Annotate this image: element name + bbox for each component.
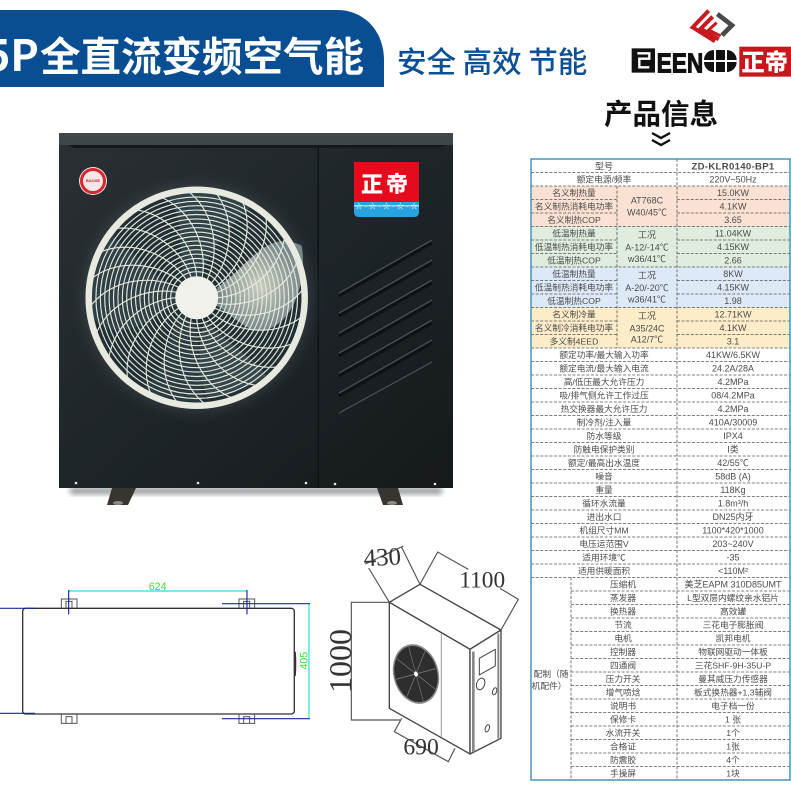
table rows: parameters: -35 xyxy=(726,553,740,563)
table rows: low temp heating: 11.04KW xyxy=(715,229,752,239)
table rows: parameters: 热交换器最大允许压力 xyxy=(561,403,647,414)
icon: double chevron xyxy=(652,133,670,145)
table rows: cooling: 12.71KW xyxy=(714,310,752,320)
table rows: accessories: 保修卡 xyxy=(610,714,636,725)
table rows: parameters: 制冷剂/注入量 xyxy=(577,417,632,428)
table rows: parameters: 重量 xyxy=(595,484,613,495)
table rows: accessories: 1张 xyxy=(726,742,740,752)
table rows: ultra low temp heating: 8KW xyxy=(723,269,743,279)
sticker: BAOSE xyxy=(86,178,100,183)
table rows: accessories: 说明书 xyxy=(610,700,636,711)
table rows: accessories label: 机配件） xyxy=(532,680,566,691)
table rows: ultra low temp heating: 低温制热消耗电功率 xyxy=(535,282,613,293)
table rows: parameters: 4.2MPa xyxy=(717,404,749,414)
dimension lines xyxy=(351,546,518,762)
table rows: nominal heating: W40/45℃ xyxy=(627,208,667,218)
table rows: accessories: 换热器 xyxy=(610,606,636,617)
table rows: cooling: 名义制冷量 xyxy=(552,309,596,320)
table rows: parameters: 额定功率/最大输入功率 xyxy=(559,349,649,360)
table rows: ultra low temp heating: 低温制热COP xyxy=(547,295,601,306)
unit feet xyxy=(107,488,403,505)
logo wordmark xyxy=(632,47,737,78)
table rows: ultra low temp heating: 4.15KW xyxy=(717,283,750,293)
table rows: nominal heating: 名义制热量 xyxy=(552,187,596,198)
table rows: accessories: 高效罐 xyxy=(720,606,746,617)
table rows: cooling: 名义制冷消耗电功率 xyxy=(535,322,613,333)
fan xyxy=(69,170,325,426)
table rows: ultra low temp heating: 工况 xyxy=(638,270,656,280)
table grid xyxy=(531,159,790,780)
table rows: parameters: 额定电流/最大输入电流 xyxy=(559,363,649,374)
table rows: ultra low temp heating: 1.98 xyxy=(724,296,742,306)
table rows: ultra low temp heating: w36/41℃ xyxy=(627,294,666,304)
table rows: parameters: 机组尺寸MM xyxy=(579,525,629,536)
unit shadow xyxy=(70,488,442,494)
table rows: cooling xyxy=(535,309,752,347)
table rows: parameters: DN25内牙 xyxy=(712,511,754,522)
dimension 624: 624 xyxy=(149,581,167,593)
table rows: low temp heating: 低温制热COP xyxy=(547,255,601,266)
table rows: parameters: 适用供暖面积 xyxy=(578,565,630,576)
table rows: ultra low temp heating xyxy=(535,268,750,306)
table rows: low temp heating: 工况 xyxy=(638,230,656,240)
table rows: accessories: 压力开关 xyxy=(606,673,641,684)
table rows: parameters: 410A/30009 xyxy=(709,418,757,428)
table rows: nominal heating: 名义制热消耗电功率 xyxy=(535,201,613,212)
sticker xyxy=(79,167,107,195)
plan view dimension drawing xyxy=(0,581,310,723)
table rows: parameters: IPX4 xyxy=(723,431,743,441)
icon: logo chevrons xyxy=(693,11,732,41)
table rows: basic: 额定电源/频率 xyxy=(577,174,632,185)
table rows: accessories: 凯邦电机 xyxy=(716,633,751,644)
table rows: parameters: 4.2MPa xyxy=(717,377,749,387)
table colour bands xyxy=(531,186,790,348)
table rows: accessories: 物联网驱动一体板 xyxy=(698,646,768,657)
table rows: basic xyxy=(577,162,775,185)
table rows: accessories: 4个 xyxy=(726,755,740,765)
table rows: parameters: 额定/最高出水温度 xyxy=(568,457,640,468)
table rows: basic: 220V~50Hz xyxy=(709,175,757,185)
table rows: parameters: 噪音 xyxy=(595,471,613,482)
table rows: accessories xyxy=(606,579,782,779)
unit outline xyxy=(389,584,501,754)
table rows: nominal heating: 15.0KW xyxy=(717,188,750,198)
table rows: parameters: 高/低压最大允许压力 xyxy=(564,376,644,387)
fan hub xyxy=(175,276,218,319)
table rows: parameters: 防触电保护类别 xyxy=(574,444,634,455)
table rows: accessories label: 配制（随 xyxy=(534,668,569,679)
table rows: parameters: 电压运范围V xyxy=(579,538,629,549)
table rows: parameters: 防水等级 xyxy=(587,430,622,441)
brand badge xyxy=(354,162,419,217)
side louvers xyxy=(339,240,432,413)
fan blades xyxy=(92,193,303,402)
table rows: cooling: A12/7℃ xyxy=(631,334,663,344)
table rows: parameters: 循环水流量 xyxy=(582,498,626,509)
table rows: low temp heating: w36/41℃ xyxy=(627,254,666,264)
dimension 1100: 1100 xyxy=(459,567,505,593)
fan guard rings xyxy=(96,197,298,398)
table rows: accessories: 防震胶 xyxy=(610,754,636,765)
logo xyxy=(632,11,791,78)
table rows: parameters: 58dB (A) xyxy=(715,472,751,482)
table rows: accessories: 压缩机 xyxy=(610,579,636,590)
table rows: parameters: 203~240V xyxy=(712,539,754,549)
table rows: parameters: I类 xyxy=(727,444,739,455)
dimension lines xyxy=(0,590,310,719)
table rows: parameters: 进出水口 xyxy=(587,511,621,522)
fan outer ring xyxy=(89,190,305,406)
table rows: parameters xyxy=(559,349,764,576)
table rows: accessories: 曼其威压力传感器 xyxy=(698,673,768,684)
unit body xyxy=(59,133,453,488)
table rows: cooling: 3.1 xyxy=(727,337,739,347)
table rows: accessories: 板式换热器+1,3辅阀 xyxy=(694,687,772,698)
header banner xyxy=(0,10,384,87)
table rows: accessories: 1个 xyxy=(726,728,740,738)
table rows: low temp heating: 2.66 xyxy=(724,256,742,266)
table rows: parameters: 08/4.2MPa xyxy=(711,391,755,401)
table rows: parameters: <110M² xyxy=(718,566,748,576)
table rows: basic: 型号 xyxy=(595,162,613,172)
table rows: nominal heating xyxy=(535,187,750,225)
table rows: accessories: 节流 xyxy=(614,619,632,630)
table rows: parameters: 吸/排气侧允许工作过压 xyxy=(559,390,649,401)
table rows: parameters: 118Kg xyxy=(720,485,746,495)
brand badge: ☆-☆-☆-☆-☆ xyxy=(355,202,418,210)
section heading: 产品信息 xyxy=(604,92,718,133)
table rows: accessories: 1块 xyxy=(726,768,740,779)
table rows: basic: ZD-KLR0140-BP1 xyxy=(691,162,775,172)
table rows: cooling: 工况 xyxy=(638,311,656,321)
product photo: heat pump unit xyxy=(59,133,453,505)
table rows: low temp heating: 4.15KW xyxy=(717,242,750,252)
table rows: parameters: 42/55℃ xyxy=(717,458,749,468)
tagline: 安全 高效 节能 xyxy=(397,40,587,82)
table rows: accessories label xyxy=(532,668,569,691)
specification table xyxy=(531,159,790,780)
table rows: cooling: 4.1KW xyxy=(719,323,747,333)
fan of isometric unit xyxy=(387,640,445,708)
isometric dimension drawing xyxy=(322,543,518,762)
table rows: low temp heating: 低温制热消耗电功率 xyxy=(535,241,613,252)
table rows: parameters: 1100*420*1000 xyxy=(702,526,764,536)
table rows: accessories: 三花SHF-9H-35U-P xyxy=(695,660,771,671)
dimension 1000: 1000 xyxy=(322,629,358,693)
table rows: nominal heating: 4.1KW xyxy=(719,202,747,212)
title: 全直流变频空气能 xyxy=(40,24,364,83)
table rows: accessories: 水流开关 xyxy=(606,727,641,738)
table rows: accessories: 电机 xyxy=(614,633,632,644)
dimension 430: 430 xyxy=(363,543,402,572)
dimension 405: 405 xyxy=(298,652,310,670)
table rows: low temp heating xyxy=(535,228,752,266)
table rows: parameters: 1.8m³/h xyxy=(718,499,748,509)
table rows: nominal heating: 3.65 xyxy=(724,215,742,225)
table rows: cooling: A35/24C xyxy=(629,324,665,334)
logo wordmark: EEN xyxy=(657,47,703,78)
table rows: low temp heating: 低温制热量 xyxy=(552,228,596,239)
table rows: accessories: 蒸发器 xyxy=(610,592,636,603)
table rows: parameters: 24.2A/28A xyxy=(712,364,754,374)
fan guard spokes xyxy=(89,190,304,405)
table rows: accessories: 控制器 xyxy=(610,646,636,657)
logo red badge: 正帝 xyxy=(741,44,788,78)
table rows: ultra low temp heating: 低温制热量 xyxy=(552,268,596,279)
table border xyxy=(531,159,790,780)
table rows: parameters: 适用环境℃ xyxy=(582,552,626,563)
table rows: accessories: L型双层内螺纹亲水铝片 xyxy=(687,592,779,603)
table rows: low temp heating: A-12/-14℃ xyxy=(625,242,669,252)
unit outline xyxy=(23,608,295,714)
table rows: nominal heating: AT768C xyxy=(631,196,664,206)
table rows: nominal heating: 名义制热COP xyxy=(547,214,601,225)
dimension 690: 690 xyxy=(403,735,439,761)
table rows: accessories: 合格证 xyxy=(610,741,636,752)
table rows: accessories: 增气喷焓 xyxy=(606,687,641,698)
table rows: cooling: 多义制4EED xyxy=(550,336,598,347)
table rows: ultra low temp heating: A-20/-20℃ xyxy=(625,283,669,293)
table rows: accessories: 1 张 xyxy=(725,715,741,725)
table rows: accessories: 四通阀 xyxy=(610,661,636,671)
mounting brackets xyxy=(61,599,255,723)
table rows: accessories: 电子档一份 xyxy=(711,700,755,711)
table rows: parameters: 41KW/6.5KW xyxy=(706,350,761,360)
table rows: accessories: 美芝EAPM 310D85UMT xyxy=(684,579,782,590)
table rows: accessories: 手操屏 xyxy=(610,768,636,779)
brand badge: 正帝 xyxy=(361,167,411,199)
table rows: accessories: 三花电子膨胀阀 xyxy=(703,619,763,630)
